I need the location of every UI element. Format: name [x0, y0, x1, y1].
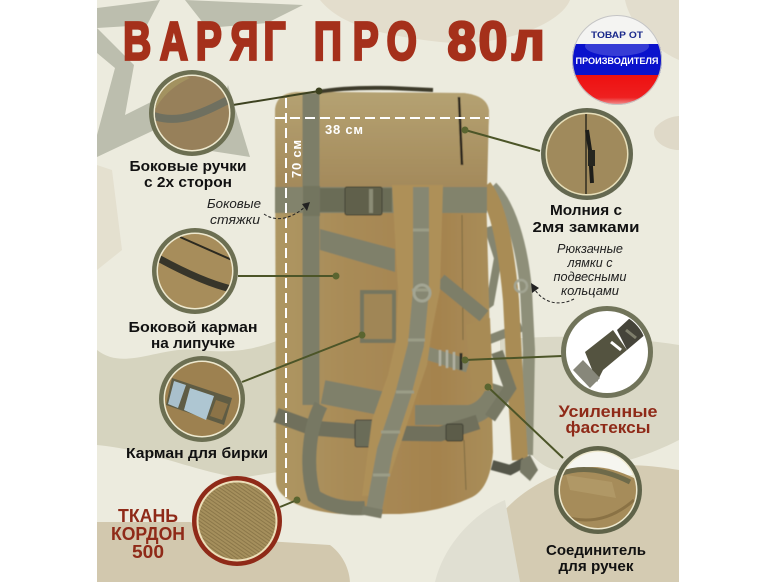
label: zipper: 2мя замками — [532, 219, 640, 236]
label: zipper: Молния с — [550, 202, 622, 219]
bag: strap vertical overlap — [303, 186, 320, 216]
bag: seam — [462, 215, 466, 490]
bag: bottom loop strap — [309, 405, 365, 508]
label: fabric: КОРДОН — [111, 523, 185, 544]
connector: tag pocket — [242, 332, 366, 382]
connector: fabric — [280, 496, 300, 507]
bag: centre buckle — [440, 350, 461, 370]
circle: side pocket — [152, 228, 238, 314]
bag: inner diagonal strap — [440, 280, 484, 316]
note: side straps: стяжки — [210, 213, 260, 227]
label: reinforced buckles: фастексы — [566, 418, 650, 437]
bag: chest strap — [420, 351, 468, 366]
label: zipper — [532, 202, 640, 236]
title: ПРО — [314, 10, 417, 71]
connector: buckle — [462, 356, 562, 364]
bag: end buckle — [520, 455, 538, 481]
bag: side band — [490, 352, 510, 418]
bag — [275, 88, 538, 515]
background: camouflage — [97, 0, 679, 582]
bag: pad ladder — [373, 230, 430, 475]
bag: top handle — [318, 88, 433, 92]
bag: side pad — [466, 318, 493, 392]
circle: fabric — [192, 476, 282, 566]
label: side handles: с 2х сторон — [144, 174, 232, 191]
label: side handles: Боковые ручки — [130, 158, 246, 175]
bag: label pocket — [362, 292, 394, 341]
bag: right shoulder webbing — [492, 187, 529, 455]
label: handle joiner: для ручек — [558, 558, 634, 575]
dimension: height line — [285, 98, 287, 497]
label: side pocket: на липучке — [151, 335, 235, 352]
label: fabric: ТКАНЬ — [118, 505, 178, 526]
bag: side compression strap — [275, 187, 487, 213]
connector: side pocket — [238, 272, 340, 280]
bag: lower strap left — [323, 392, 390, 405]
dimension: 70 cm: 70 см — [289, 140, 304, 178]
bag: vertical strap — [302, 93, 320, 405]
label: side pocket — [128, 319, 258, 352]
label: reinforced buckles — [558, 402, 658, 437]
badge: factory direct: ТОВАР ОТ — [591, 30, 643, 41]
bag: centre shoulder pad — [362, 185, 443, 496]
bag: lower right buckle — [446, 424, 463, 441]
bag: centre pad webbing — [373, 187, 421, 515]
label: side pocket: Боковой карман — [128, 319, 258, 336]
title — [123, 10, 545, 72]
bag: strap link — [488, 327, 522, 340]
circle: side handles — [149, 70, 235, 156]
bag: top cap — [275, 92, 489, 190]
circle: zipper — [541, 108, 633, 200]
note: backpack straps: подвесными — [554, 270, 627, 284]
label: tag pocket: Карман для бирки — [126, 445, 268, 462]
label: reinforced buckles: Усиленные — [558, 402, 658, 421]
bag: right shoulder pad — [484, 187, 520, 460]
connector: side handles — [233, 88, 322, 105]
background: army star — [97, 0, 303, 157]
note: backpack straps: кольцами — [561, 284, 619, 298]
label: side handles — [130, 158, 246, 191]
bag: zipper — [459, 97, 462, 165]
dimension: width line — [275, 117, 489, 119]
bag: lower side strap — [276, 415, 478, 434]
bag: top side buckle — [345, 187, 382, 215]
bag: right D-ring — [515, 280, 527, 292]
note: backpack straps: Рюкзачные — [557, 242, 623, 256]
note: backpack straps — [531, 242, 627, 303]
bag: diagonal strap — [320, 229, 395, 272]
bag: lower strap right — [415, 385, 498, 415]
note: side straps — [207, 197, 310, 227]
label: fabric: 500 — [132, 541, 164, 562]
bag: lower strap end — [492, 462, 525, 470]
title: ВАРЯГ — [123, 10, 286, 71]
bag: body — [275, 92, 493, 514]
badge: factory direct — [572, 15, 662, 105]
bag: lower side buckle — [355, 420, 375, 447]
note: backpack straps: лямки с — [566, 256, 613, 270]
bag: bottom strap tail — [362, 510, 382, 514]
note: side straps: Боковые — [207, 197, 261, 211]
bag: inner grey strap — [470, 227, 498, 318]
connector: handle joiner — [484, 384, 563, 458]
title: 80л — [447, 11, 545, 72]
dimension: 38 cm: 38 см — [325, 122, 363, 137]
bag: D-ring left — [414, 285, 430, 301]
label: fabric — [111, 505, 185, 562]
label: handle joiner — [546, 542, 646, 575]
circle: handle joiner — [554, 445, 645, 535]
circle: buckle — [561, 306, 653, 398]
bag: strap dark part — [320, 188, 392, 212]
badge: factory direct: ПРОИЗВОДИТЕЛЯ — [576, 56, 658, 66]
circle: tag pocket — [159, 355, 250, 445]
label: handle joiner: Соединитель — [546, 542, 646, 559]
connector: zipper — [462, 126, 540, 151]
